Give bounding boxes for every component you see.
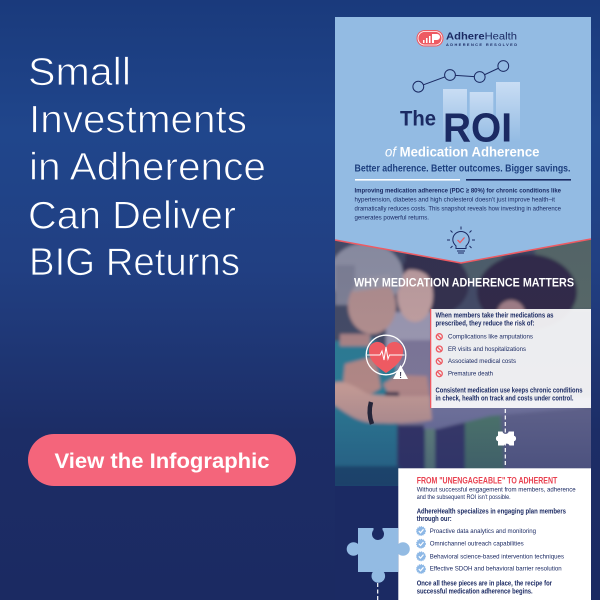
risk intro text: prescribed, they reduce the risk of:	[436, 320, 534, 327]
specialization text	[417, 508, 566, 523]
capabilities list	[417, 527, 565, 573]
capabilities list: Omnichannel outreach capabilities	[430, 541, 524, 548]
logo: AdhereHealth: Adhere Health	[446, 31, 517, 42]
connector: lower dashed line	[377, 583, 379, 600]
risk intro text	[436, 313, 554, 327]
capabilities list: Proactive data analytics and monitoring	[430, 528, 536, 535]
intro paragraph: hypertension, diabetes and high cholesterol doesn’t just improve health–it	[354, 196, 555, 204]
title: The ROI	[400, 105, 512, 151]
title: The ROI: ROI	[443, 105, 512, 151]
icon: wristband	[370, 402, 372, 424]
risk list: Premature death	[448, 371, 493, 378]
section intro	[417, 486, 576, 501]
risk intro text: When members take their medications as	[436, 313, 554, 320]
closing text: Once all these pieces are in place, the recipe for	[417, 581, 552, 588]
icon: puzzle piece	[347, 527, 410, 583]
logo: AdhereHealth	[416, 30, 517, 47]
headline: in Adherence	[29, 146, 266, 189]
risk list: ER visits and hospitalizations	[448, 346, 527, 353]
title: The ROI: The	[400, 108, 436, 131]
icon: light bulb	[447, 226, 475, 253]
heading: why medication adherence matters: WHY MEDICATION ADHERENCE MATTERS	[354, 276, 574, 290]
section intro: and the subsequent ROI isn’t possible.	[417, 494, 511, 501]
closing text	[417, 581, 552, 595]
headline: Can Deliver	[28, 194, 236, 237]
headline: BIG Returns	[29, 241, 240, 284]
icon: heart with pulse and warning	[366, 335, 408, 380]
intro paragraph: dramatically reduces costs. This snapshot reveals how investing in adherence	[354, 206, 561, 212]
section heading: FROM "UNENGAGEABLE" TO ADHERENT	[417, 476, 558, 486]
risk conclusion: in check, health on track and costs under control.	[436, 395, 574, 402]
risk list	[436, 334, 534, 378]
capabilities list: Effective SDOH and behavioral barrier resolution	[430, 566, 562, 573]
button: view the infographic	[28, 434, 296, 486]
section intro: Without successful engagement from members, adherence	[417, 486, 576, 494]
intro paragraph	[354, 188, 561, 222]
logo: AdhereHealth: ADHERENCE RESOLVED	[446, 42, 517, 47]
headline: Small	[28, 51, 131, 94]
intro paragraph: Improving medication adherence (PDC ≥ 80%) for chronic conditions like	[354, 188, 561, 194]
connector: dashed line with puzzle piece	[496, 409, 516, 467]
panel: title section	[335, 17, 591, 263]
panel: risks reduced	[430, 309, 591, 408]
risk list: Complications like amputations	[448, 334, 534, 340]
panel: from unengageable to adherent	[398, 468, 591, 600]
specialization text: AdhereHealth specializes in engaging plan members	[417, 508, 566, 515]
risk conclusion	[436, 388, 583, 402]
intro paragraph: generates powerful returns.	[354, 214, 429, 222]
capabilities list: Behavioral science-based intervention techniques	[430, 553, 565, 560]
chart: rising bars and line	[413, 61, 520, 142]
closing text: successful medication adherence begins.	[417, 588, 533, 595]
photo: grandmother and family	[329, 235, 598, 494]
red divider	[335, 239, 591, 263]
headline	[28, 51, 266, 284]
headline: Investments	[29, 99, 247, 142]
icon: heart with pulse and warning: !	[399, 371, 402, 380]
specialization text: through our:	[417, 516, 452, 523]
subtitle: of Medication Adherence: of Medication Adherence	[385, 144, 540, 160]
infographic preview	[329, 17, 598, 600]
button: view the infographic: View the Infographic	[54, 450, 270, 473]
risk list: Associated medical costs	[448, 358, 517, 365]
